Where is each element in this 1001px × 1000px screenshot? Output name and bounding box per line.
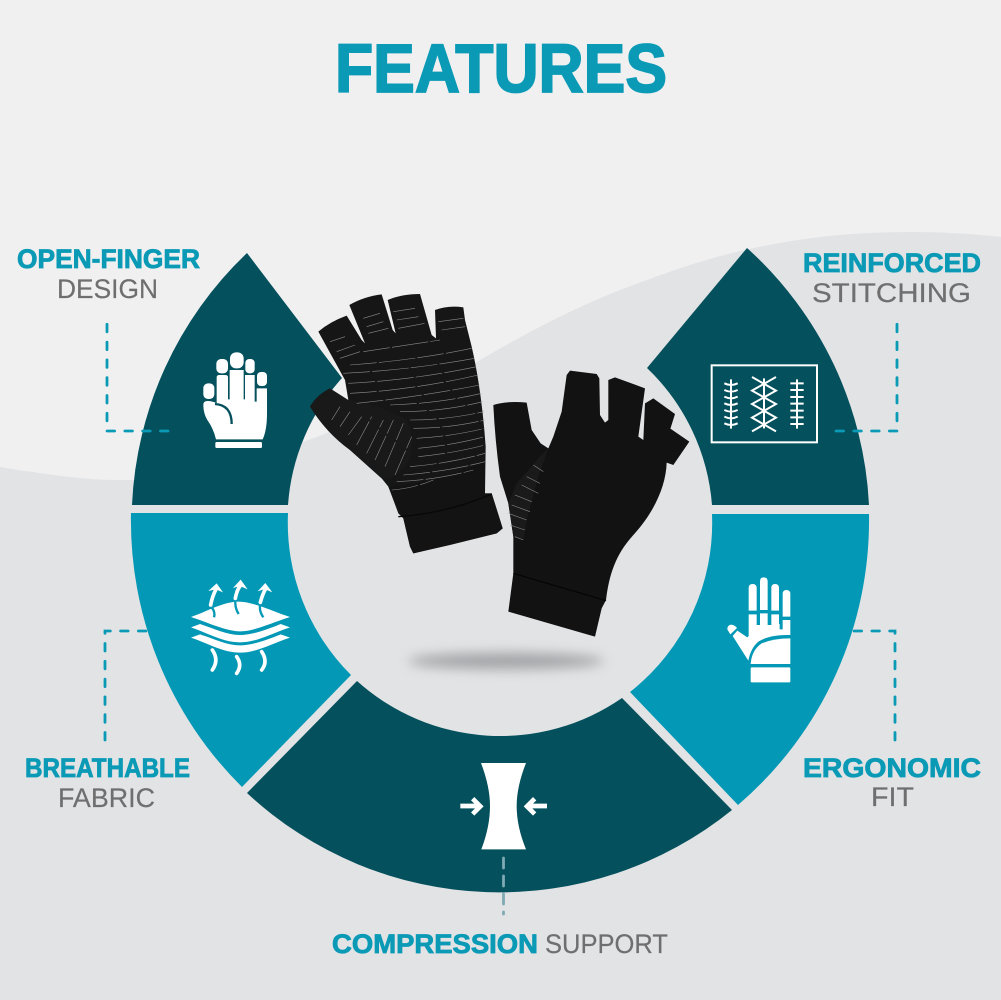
panel: breathable segment [131, 513, 351, 787]
label: reinforced stitching [803, 248, 981, 308]
icon: breathable fabric [191, 580, 290, 673]
label: ergonomic fit: FIT [871, 782, 914, 812]
icon: ergonomic hand [727, 577, 790, 682]
connector: open-finger [107, 322, 168, 431]
label: compression support: COMPRESSION [332, 929, 538, 959]
label: open-finger design: OPEN-FINGER [17, 244, 200, 274]
panel: reinforced stitching segment [647, 248, 869, 505]
label: breathable fabric: BREATHABLE [25, 753, 190, 783]
label: compression support: SUPPORT [545, 929, 668, 959]
icon: compression [460, 763, 547, 849]
icon: stitching [712, 365, 817, 442]
shadow under gloves [408, 653, 604, 669]
label: open-finger design [17, 244, 200, 304]
label: compression support [332, 929, 668, 959]
panel: open-finger segment [132, 253, 342, 505]
glove: back side [493, 371, 689, 637]
label: reinforced stitching: STITCHING [812, 278, 971, 308]
label: breathable fabric: FABRIC [58, 783, 155, 813]
glove: palm side [310, 294, 503, 553]
icon: open-finger hand [203, 352, 267, 448]
title: FEATURES [335, 30, 667, 107]
connector: breathable [105, 631, 147, 740]
panel: compression segment [247, 681, 732, 892]
label: ergonomic fit: ERGONOMIC [803, 753, 981, 783]
label: reinforced stitching: REINFORCED [803, 248, 981, 278]
label: open-finger design: DESIGN [57, 274, 158, 304]
connector: ergonomic [853, 631, 895, 740]
connector: reinforced stitching [836, 322, 897, 431]
gloves [310, 294, 689, 637]
label: breathable fabric [25, 753, 190, 813]
connector: compression [502, 858, 505, 914]
panel: ergonomic segment [630, 514, 869, 805]
label: ergonomic fit [803, 753, 981, 812]
